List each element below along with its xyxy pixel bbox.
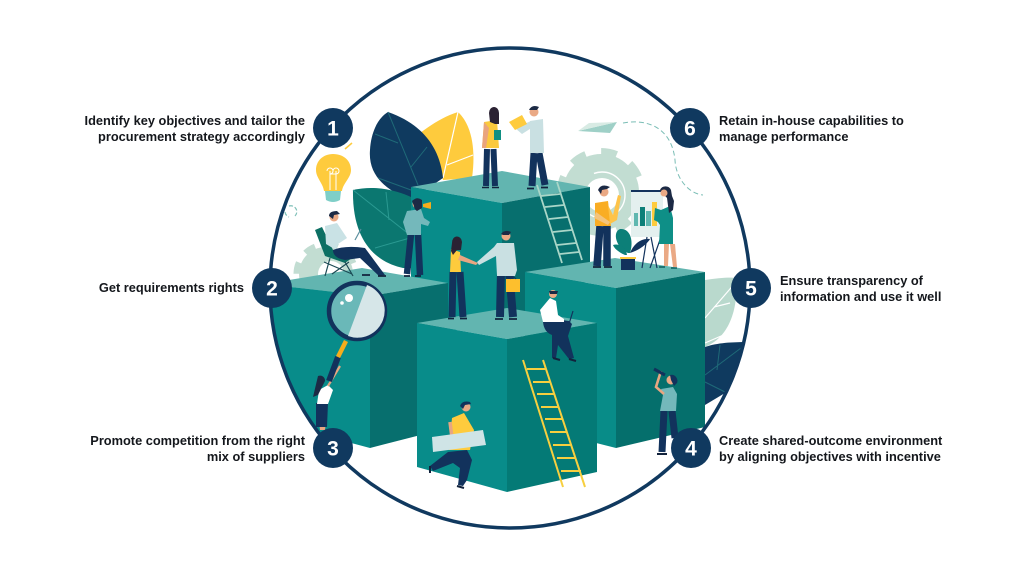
label 4: Create shared-outcome environment — [719, 433, 943, 448]
person: woman with tablet — [482, 107, 501, 188]
label 1: procurement strategy accordingly — [98, 129, 306, 144]
icon: paper plane — [578, 122, 617, 133]
label 2: Get requirements rights — [99, 280, 244, 295]
ladder: yellow — [523, 360, 585, 487]
label 1: Identify key objectives and tailor the — [85, 113, 305, 128]
icon: magnifying glass — [329, 283, 385, 381]
person: man with megaphone — [403, 198, 431, 276]
badge 5: 5 — [745, 278, 757, 300]
leaf: navy — [370, 112, 443, 200]
icon: light bulb — [316, 143, 352, 202]
person: man in orange with gear — [593, 186, 621, 267]
dashed flight path — [623, 122, 703, 195]
main circle — [270, 48, 750, 528]
person: man sitting on block — [540, 290, 576, 361]
icon: potted plant — [613, 229, 650, 270]
leaf: right navy — [705, 342, 742, 405]
block: top back — [411, 171, 590, 330]
label 6: manage performance — [719, 129, 848, 144]
label 5: Ensure transparency of — [780, 273, 924, 288]
badge 6: 6 — [684, 118, 696, 140]
person: photographer with binoculars — [654, 369, 677, 454]
person: runner with plank — [430, 402, 486, 488]
icon: large gear — [562, 152, 640, 232]
leaf: right pale — [705, 278, 736, 347]
badge 4 — [671, 428, 711, 468]
person: seated man on chair — [315, 211, 386, 276]
label 4: by aligning objectives with incentive — [719, 449, 941, 464]
label 6: Retain in-house capabilities to — [719, 113, 904, 128]
block: left — [265, 268, 448, 448]
badge 3: 3 — [327, 438, 339, 460]
person: man with paper — [509, 106, 548, 188]
label 5: information and use it well — [780, 289, 941, 304]
badge 1: 1 — [327, 118, 339, 140]
person: presenter woman — [654, 186, 677, 268]
badge 4: 4 — [685, 438, 697, 460]
person: woman with magnifier — [313, 366, 340, 430]
label 3: Promote competition from the right — [90, 433, 306, 448]
icon: dashed small circle — [285, 206, 297, 217]
badge 6 — [670, 108, 710, 148]
badge 2: 2 — [266, 278, 278, 300]
leaf: yellow — [420, 112, 473, 180]
chart board — [631, 191, 663, 268]
leaf: green — [353, 188, 411, 268]
badge 2 — [252, 268, 292, 308]
badge 1 — [313, 108, 353, 148]
block: right — [525, 258, 705, 448]
icon: small gear — [297, 245, 355, 303]
block: front — [417, 308, 597, 492]
badge 3 — [313, 428, 353, 468]
ladder: pale — [537, 182, 582, 263]
label 3: mix of suppliers — [207, 449, 305, 464]
person: handshake man — [477, 231, 520, 319]
badge 5 — [731, 268, 771, 308]
person: handshake woman — [448, 236, 478, 318]
